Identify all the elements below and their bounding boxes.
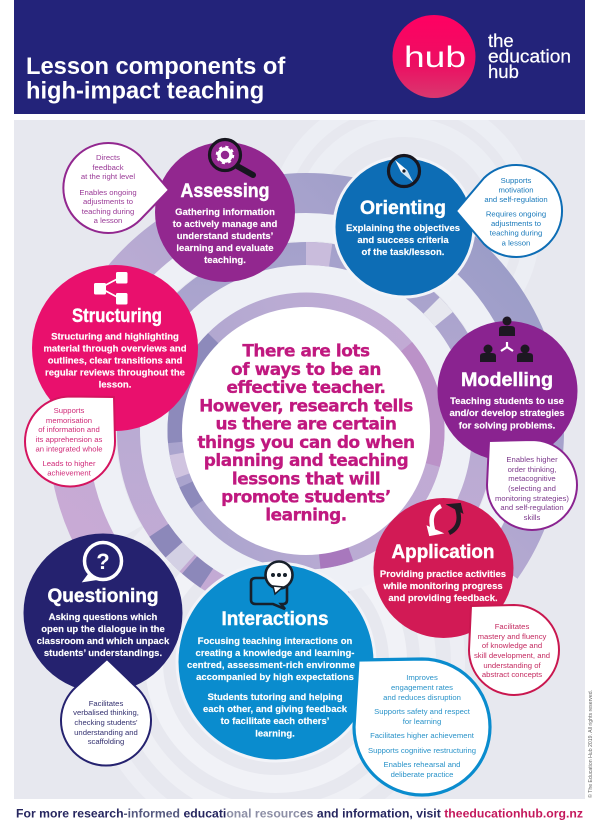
panel: structuring callout: Supports: [54, 406, 85, 415]
panel: interactions callout: Improves: [406, 673, 438, 682]
panel: orienting callout: [456, 165, 562, 257]
panel: assessing: [155, 140, 295, 282]
panel: orienting callout: adjustments to: [491, 219, 541, 228]
panel: application: Application: [392, 542, 494, 563]
panel: modelling callout: metacognitive: [508, 474, 556, 483]
panel: interactions callout: [354, 659, 490, 795]
panel: orienting callout: and self-regulation: [484, 195, 548, 204]
panel: orienting: [334, 156, 474, 297]
centre message: lessons that will: [232, 468, 380, 488]
middle ring: [117, 242, 488, 591]
panel: structuring callout: achievement: [47, 468, 92, 478]
panel: application: Providing practice activities: [380, 569, 506, 580]
panel: orienting: Explaining the objectives: [346, 223, 460, 234]
footer line: For more research-informed educational resources and information, visit theeducationhub.org.nz: [16, 806, 583, 820]
panel: interactions callout: Supports cognitive restructuring: [368, 746, 476, 755]
panel: modelling callout: skills: [524, 513, 540, 522]
logo: education: [488, 46, 571, 66]
panel: assessing callout: teaching during: [82, 207, 134, 216]
panel: interactions callout: for learning: [403, 717, 441, 726]
icon: speech bubbles: [251, 562, 292, 609]
panel: application callout: mastery and fluency: [478, 632, 547, 641]
panel: questioning: classroom and which unpack: [37, 636, 170, 647]
icon: three people: [480, 316, 533, 362]
panel: interactions: centred, assessment-rich environme: [187, 660, 355, 671]
panel: modelling: Teaching students to use: [450, 396, 564, 407]
panel: structuring callout: its apprehension as: [36, 435, 102, 444]
panel: orienting callout: motivation: [498, 186, 534, 194]
panel: structuring callout: memorisation: [46, 416, 92, 425]
icon: network nodes: [94, 272, 128, 304]
panel: assessing: to actively manage and: [173, 219, 277, 230]
panel: application callout: Facilitates: [495, 622, 529, 631]
title: high-impact teaching: [26, 78, 264, 104]
panel: application callout: understanding of: [483, 661, 541, 670]
panel: modelling: and/or develop strategies: [449, 408, 565, 419]
panel: structuring: [32, 265, 198, 431]
panel: orienting: and success criteria: [357, 235, 449, 246]
panel: interactions callout: Enables rehearsal and: [384, 760, 460, 769]
centre message: us there are certain: [216, 414, 396, 434]
icon: magnifying glass with gear: [210, 140, 253, 175]
panel: assessing: teaching.: [204, 255, 246, 266]
panel: structuring: outlines, clear transitions and: [48, 356, 182, 366]
icon: question speech bubble: ?: [96, 549, 110, 574]
panel: questioning: Questioning: [48, 586, 158, 607]
panel: questioning: open up the dialogue in the: [41, 624, 165, 635]
centre message: promote students’: [221, 486, 391, 506]
panel: application: while monitoring progress: [382, 581, 503, 592]
panel: assessing callout: a lesson: [94, 216, 122, 225]
panel: application callout: of knowledge and: [482, 641, 542, 650]
panel: application: and providing feedback.: [388, 593, 498, 604]
panel: structuring: lesson.: [99, 380, 131, 390]
panel: structuring callout: Leads to higher: [42, 459, 96, 468]
panel: interactions: accompanied by high expectations: [196, 672, 354, 683]
panel: structuring callout: [25, 396, 115, 487]
panel: assessing callout: Directs: [96, 153, 120, 162]
panel: orienting callout: a lesson: [502, 238, 530, 248]
panel: application callout: [469, 605, 559, 695]
icon: question speech bubble: [84, 542, 122, 581]
title: Lesson components of: [26, 54, 285, 80]
panel: structuring callout: an integrated whole: [35, 444, 103, 454]
outer ring: [50, 173, 564, 579]
centre message: [197, 340, 415, 524]
panel: questioning: students’ understandings.: [44, 648, 162, 659]
panel: structuring: Structuring and highlighting: [51, 332, 179, 342]
logo: the: [488, 30, 514, 51]
logo: hub: [404, 41, 466, 74]
panel: questioning callout: verbalised thinking,: [73, 708, 139, 717]
header banner: [14, 0, 585, 114]
panel: modelling callout: Enables higher: [506, 455, 558, 464]
panel: structuring: material through overviews and: [43, 344, 187, 354]
panel: interactions: each other, and giving feedback: [203, 704, 348, 715]
centre circle: [182, 307, 430, 555]
panel: questioning callout: Facilitates: [89, 699, 123, 708]
panel: modelling: Modelling: [461, 370, 553, 391]
panel: interactions: Students tutoring and helping: [207, 692, 343, 703]
panel: modelling callout: monitoring strategies): [495, 494, 569, 503]
panel: questioning callout: scaffolding: [88, 737, 124, 746]
panel: interactions callout: deliberate practice: [391, 770, 453, 779]
panel: interactions callout: engagement rates: [391, 683, 453, 692]
panel: orienting: Orienting: [360, 198, 446, 219]
panel: modelling: [438, 316, 578, 461]
panel: orienting callout: teaching during: [490, 228, 542, 238]
icon: compass: [388, 156, 420, 186]
background panel with concentric rings: [14, 120, 585, 799]
copyright note: © The Education Hub 2019. All rights reserved.: [587, 690, 594, 798]
panel: assessing: Assessing: [180, 181, 270, 202]
panel: questioning callout: understanding and: [74, 728, 138, 737]
icon: refresh arrows: [428, 504, 462, 535]
panel: assessing callout: adjustments to: [83, 197, 133, 206]
panel: modelling callout: order thinking,: [508, 465, 556, 474]
panel: questioning callout: checking students’: [74, 718, 138, 727]
panel: questioning: Asking questions which: [49, 612, 158, 623]
panel: interactions: to facilitate each others’: [221, 716, 329, 727]
panel: interactions: learning.: [255, 728, 295, 740]
panel: structuring: regular reviews throughout the: [45, 368, 185, 378]
panel: assessing callout: at the right level: [81, 172, 135, 181]
panel: assessing: understand students’: [177, 231, 273, 242]
panel: interactions: Focusing teaching interactions on: [198, 636, 353, 647]
panel: orienting callout: Requires ongoing: [486, 210, 546, 218]
panel: orienting: of the task/lesson.: [362, 247, 444, 258]
panel: modelling: for solving problems.: [459, 420, 555, 432]
panel: modelling callout: and self-regulation: [500, 503, 564, 512]
centre message: However, research tells: [199, 396, 413, 416]
panel: interactions: creating a knowledge and learning-: [196, 648, 354, 659]
panel: application: [374, 498, 514, 638]
title: [26, 54, 285, 104]
panel: structuring: Structuring: [72, 306, 162, 327]
logo: hub: [488, 61, 519, 82]
panel: structuring callout: of information and: [38, 425, 100, 434]
checker segments: [182, 556, 213, 588]
centre message: things you can do when: [197, 432, 415, 452]
panel: interactions callout: Facilitates higher achievement: [370, 731, 475, 740]
panel: interactions callout: Supports safety and respect: [374, 707, 471, 716]
panel: interactions: [177, 562, 375, 761]
panel: application callout: skill development, and: [474, 651, 550, 660]
panel: assessing callout: feedback: [92, 163, 124, 172]
centre message: of ways to be an: [231, 359, 381, 379]
panel: modelling callout: (selecting and: [508, 484, 556, 493]
panel: assessing: learning and evaluate: [176, 243, 274, 254]
panel: interactions callout: and reduces disruption: [383, 693, 461, 702]
inner ring: [175, 300, 437, 562]
logo: [392, 15, 571, 98]
panel: modelling callout: [487, 440, 577, 530]
panel: assessing callout: [63, 143, 169, 233]
centre message: learning.: [265, 504, 347, 524]
panel: questioning: [24, 534, 182, 692]
panel: assessing callout: Enables ongoing: [79, 188, 137, 197]
centre message: effective teacher.: [226, 377, 386, 397]
panel: assessing: Gathering information: [175, 207, 275, 218]
panel: interactions: Interactions: [222, 609, 328, 630]
centre message: planning and teaching: [204, 450, 408, 470]
centre message: There are lots: [242, 340, 370, 360]
panel: application callout: abstract concepts: [482, 670, 542, 679]
panel: orienting callout: Supports: [501, 176, 532, 185]
panel: questioning callout: [61, 659, 151, 766]
